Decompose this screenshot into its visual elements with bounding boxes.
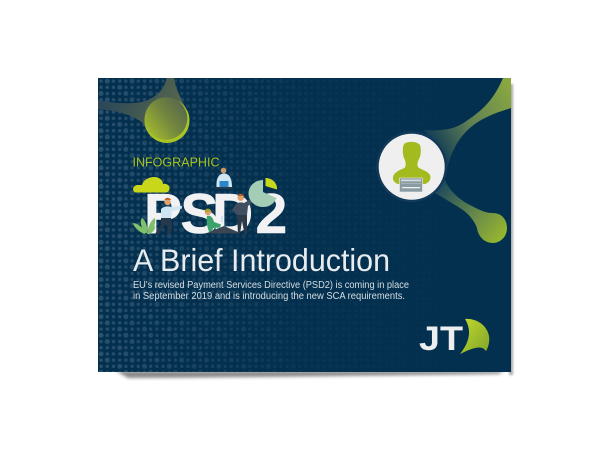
heading: A Brief Introduction: A Brief Introduction — [133, 242, 390, 278]
icon: cloud — [133, 177, 170, 192]
icon: plant — [133, 218, 155, 234]
graphic: top right branch — [424, 78, 511, 170]
logo: JT — [419, 319, 489, 358]
label: INFOGRAPHIC: INFOGRAPHIC — [132, 156, 220, 170]
icon: user with card in circle — [376, 131, 447, 202]
dot pattern background — [98, 78, 286, 372]
graphic: green drop top left — [98, 78, 190, 143]
page shadow — [116, 84, 513, 378]
text: intro paragraph: in September 2019 and is introducing the new SCA requirements. — [133, 291, 405, 302]
figure: man pushing P — [155, 198, 182, 234]
figure: standing businessman pointing at chart — [232, 194, 257, 234]
panel: navy cover — [98, 78, 511, 372]
logo: JT: JT — [419, 320, 463, 358]
text: intro paragraph: EU's revised Payment Services Directive (PSD2) is coming in place — [133, 280, 409, 291]
figure: seated person with laptop on top of D — [215, 168, 233, 189]
chart: pie chart — [248, 178, 277, 207]
figure: man sitting against S and D — [205, 209, 238, 234]
text: intro paragraph — [133, 280, 409, 302]
icon: payment card — [400, 178, 422, 192]
graphic: bottom right branch with drop — [435, 180, 507, 243]
icon: logo sail — [460, 319, 489, 354]
icon: person silhouette — [393, 142, 430, 184]
heading: PSD2: PSD2 — [144, 182, 287, 246]
